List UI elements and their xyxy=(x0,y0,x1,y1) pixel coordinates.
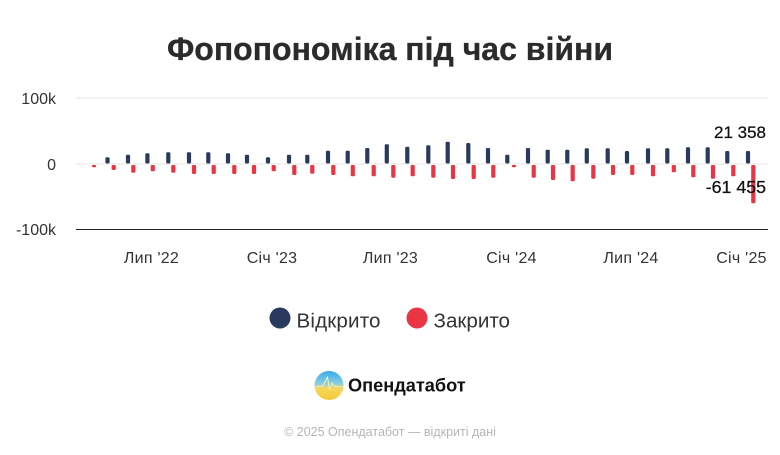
legend: opened: Відкрито xyxy=(296,310,381,332)
y axis labels: 0 xyxy=(47,157,56,174)
y axis labels: -100k xyxy=(16,222,57,239)
x axis labels: Лип '22 xyxy=(124,250,179,267)
legend: closed: Закрито xyxy=(434,310,510,332)
title: Фопопономіка під час війни xyxy=(167,31,613,67)
x axis labels: Січ '23 xyxy=(247,250,297,267)
footer: © 2025 Опендатабот — відкриті дані xyxy=(284,425,496,439)
x axis labels: Лип '24 xyxy=(603,250,659,267)
bars: opened xyxy=(105,142,750,164)
x axis labels: Лип '23 xyxy=(363,250,418,267)
bars: closed xyxy=(92,165,755,203)
y axis labels xyxy=(16,91,57,239)
legend xyxy=(270,308,510,332)
value label: last opened: 21 358 xyxy=(714,123,766,142)
x axis labels: Січ '25 xyxy=(716,250,767,267)
legend: opened xyxy=(270,308,381,332)
value label: last closed: -61 455 xyxy=(706,177,766,197)
logo: Opendatabot xyxy=(314,371,466,400)
x axis labels: Січ '24 xyxy=(486,250,537,267)
x axis labels xyxy=(124,250,767,267)
logo: Opendatabot: Опендатабот xyxy=(348,376,466,396)
legend: closed xyxy=(406,308,510,332)
y axis labels: 100k xyxy=(21,91,57,108)
